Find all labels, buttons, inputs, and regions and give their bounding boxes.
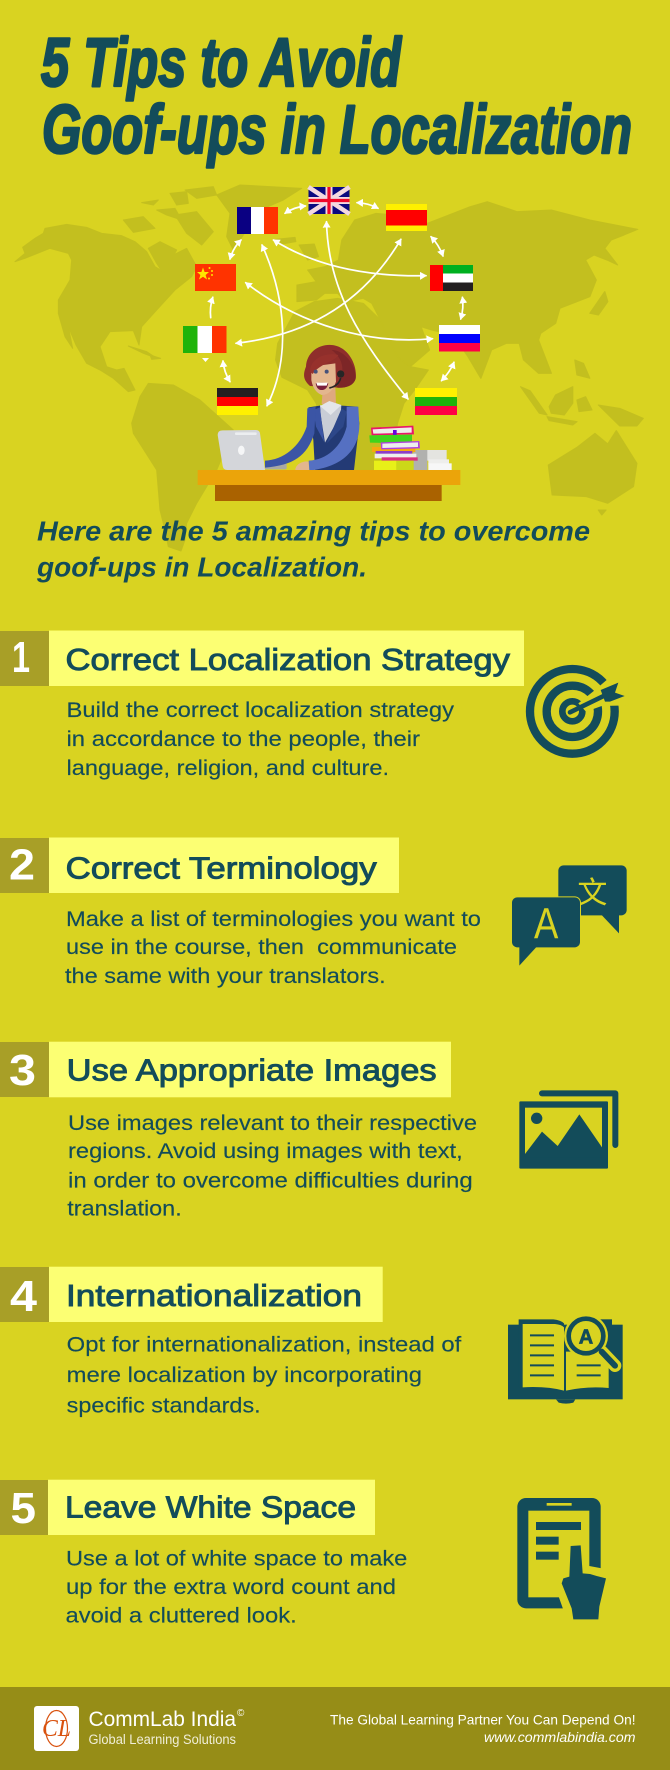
tip 1 body: Build the correct localization strategy [66,699,455,722]
icon: translation speech bubbles: 文 [577,868,607,912]
title: 5 Tips to Avoid [41,24,402,101]
tip 5 body: up for the extra word count and [66,1576,396,1599]
tip 5 number [0,1480,48,1535]
tip 2: Correct Terminology [0,838,627,988]
company name [88,1708,245,1747]
flag: China [195,264,236,291]
desk [198,470,460,501]
tip 2 number: 2 [9,840,35,889]
tip 3 body [67,1112,477,1221]
map: Americas and Greenland [15,185,302,551]
icon: open book with magnifier [508,1314,623,1404]
woman [265,345,359,471]
tip 3 heading: Use Appropriate Images [67,1053,437,1088]
tip 4 heading: Internationalization [66,1278,362,1313]
tip 2 body [65,908,481,988]
tip 3: Use Appropriate Images [0,1042,615,1221]
tip 5 heading [48,1480,375,1535]
illustration: woman with headset at desk [198,345,460,501]
tip 3 body: in order to overcome difficulties during [68,1169,473,1192]
tip 3 number: 3 [9,1046,36,1095]
tip 5 body: Use a lot of white space to make [66,1548,407,1571]
tip 5: Leave White Space [0,1480,606,1628]
intro text: goof-ups in Localization. [36,552,367,583]
tip 3 body: regions. Avoid using images with text, [68,1140,463,1163]
tip 2 number [0,838,49,893]
tip 5 heading: Leave White Space [65,1489,356,1524]
map: Europe, Africa, Asia, Oceania [276,202,643,515]
stack of books [369,426,452,470]
flag: United Kingdom [308,187,350,214]
tip 4 body: Opt for internationalization, instead of [67,1334,461,1357]
company name: © [237,1708,245,1719]
flag: Spain [386,204,427,231]
tip 1 body: language, religion, and culture. [66,757,389,780]
logo: CommLab India mark [34,1706,79,1751]
tagline: www.commlabindia.com [484,1729,636,1745]
tip 1 number [0,631,49,686]
laptop [218,430,287,470]
tip 4 heading [49,1267,383,1322]
tip 1 body: in accordance to the people, their [66,728,420,751]
tip 5 body [66,1548,407,1628]
tip 3 body: translation. [67,1198,182,1221]
tip 5 body: avoid a cluttered look. [66,1605,297,1628]
company name: CommLab India [88,1708,236,1731]
logo: CommLab India mark: CL [42,1716,71,1742]
tip 5 number: 5 [10,1484,36,1533]
icon: tablet with pointing hand [517,1498,606,1619]
tip 1 body [66,699,455,780]
tip 4 body: specific standards. [67,1395,261,1418]
flag: UAE [430,265,473,291]
tip 3 body: Use images relevant to their respective [68,1112,477,1135]
title [41,24,632,168]
tip 4: Internationalization [0,1267,623,1418]
tip 2 body: Make a list of terminologies you want to [66,908,481,931]
tip 4 number [0,1267,49,1322]
icon: open book with magnifier: A [579,1326,593,1348]
tip 3 heading [49,1042,451,1097]
intro text: Here are the 5 amazing tips to overcome [37,516,590,547]
tagline [330,1711,636,1745]
world map background [15,185,643,551]
icon: stacked pictures [519,1093,615,1169]
tip 3 number [0,1042,49,1097]
flag: Italy [183,326,226,353]
flag: Germany [217,388,258,415]
icon: translation speech bubbles [512,865,627,966]
footer band [0,1687,670,1770]
tip 4 number: 4 [10,1272,38,1321]
tip 2 heading [49,838,399,893]
tip 4 body: mere localization by incorporating [67,1364,422,1387]
tip 4 body [67,1334,461,1418]
intro text [36,516,590,583]
tip 2 body: use in the course, then communicate [66,936,457,959]
flag: Russia [439,325,480,352]
tip 1 heading: Correct Localization Strategy [66,642,511,677]
company name: Global Learning Solutions [88,1732,236,1747]
tip 1 heading [49,630,524,686]
tip 1: Correct Localization Strategy [0,630,628,780]
tagline: The Global Learning Partner You Can Depend On! [330,1711,636,1727]
flag: France [237,207,278,234]
tip 2 heading: Correct Terminology [66,850,377,885]
connection arrows between flags [202,203,463,406]
icon: target with arrow [530,669,628,754]
flag: Lithuania [415,388,457,415]
tip 1 number: 1 [12,633,30,682]
tip 2 body: the same with your translators. [65,965,386,988]
icon: translation speech bubbles: A [534,900,558,948]
